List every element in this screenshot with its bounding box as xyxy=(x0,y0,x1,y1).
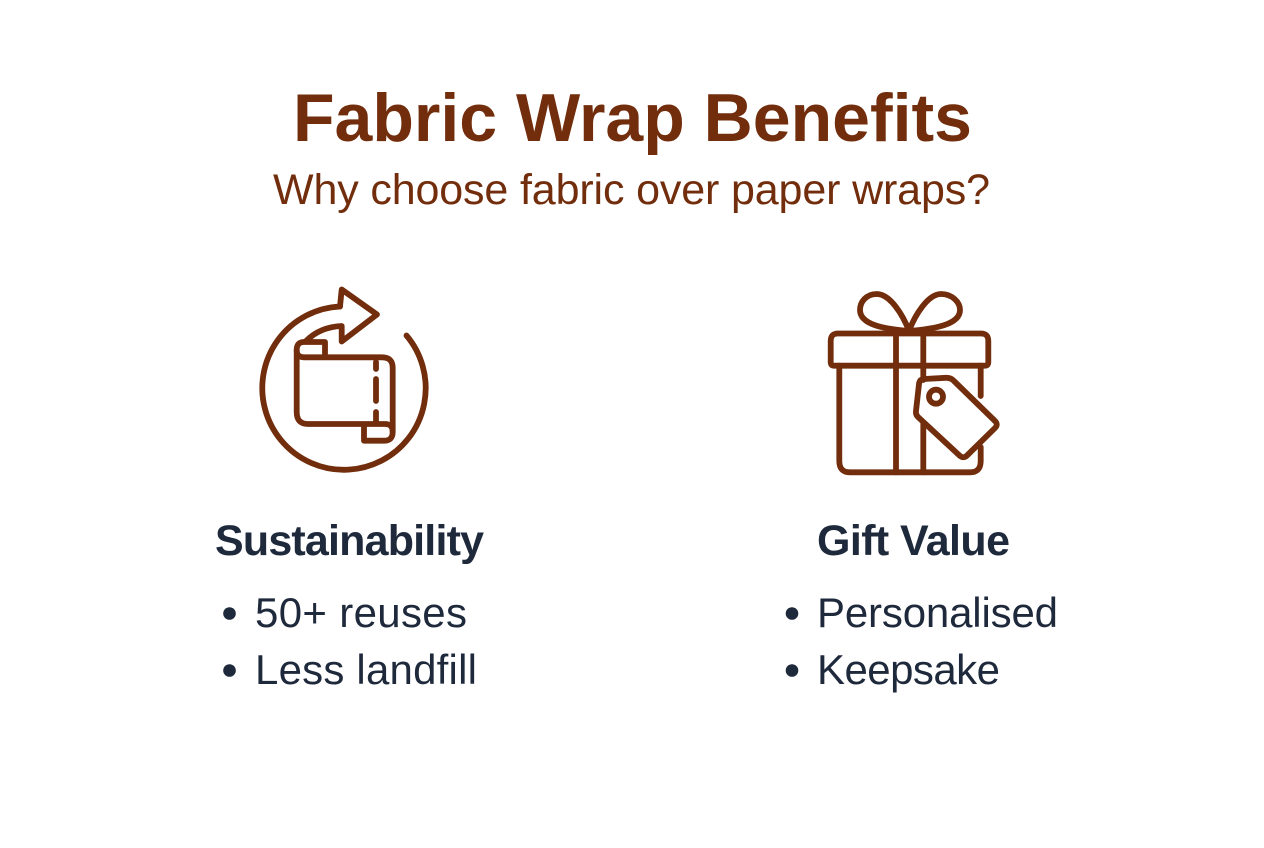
title: Fabric Wrap Benefits xyxy=(293,80,972,156)
icon: gift box with tag xyxy=(831,294,997,472)
heading: sustainability: Sustainability xyxy=(215,517,484,565)
heading: gift value: Gift Value xyxy=(817,517,1010,565)
panel: gift value xyxy=(786,294,1058,693)
bullet list: gift value xyxy=(786,589,1058,693)
bullet list: sustainability xyxy=(223,589,477,693)
bullet list: gift value: Personalised xyxy=(817,589,1058,636)
bullet list: gift value: Keepsake xyxy=(817,646,1000,693)
subtitle: Why choose fabric over paper wraps? xyxy=(273,166,990,214)
panel: sustainability xyxy=(215,290,484,693)
bullet list: sustainability: Less landfill xyxy=(255,646,477,693)
icon: reusable fabric roll with circular arrow xyxy=(262,290,426,470)
bullet list: sustainability: 50+ reuses xyxy=(255,589,467,636)
